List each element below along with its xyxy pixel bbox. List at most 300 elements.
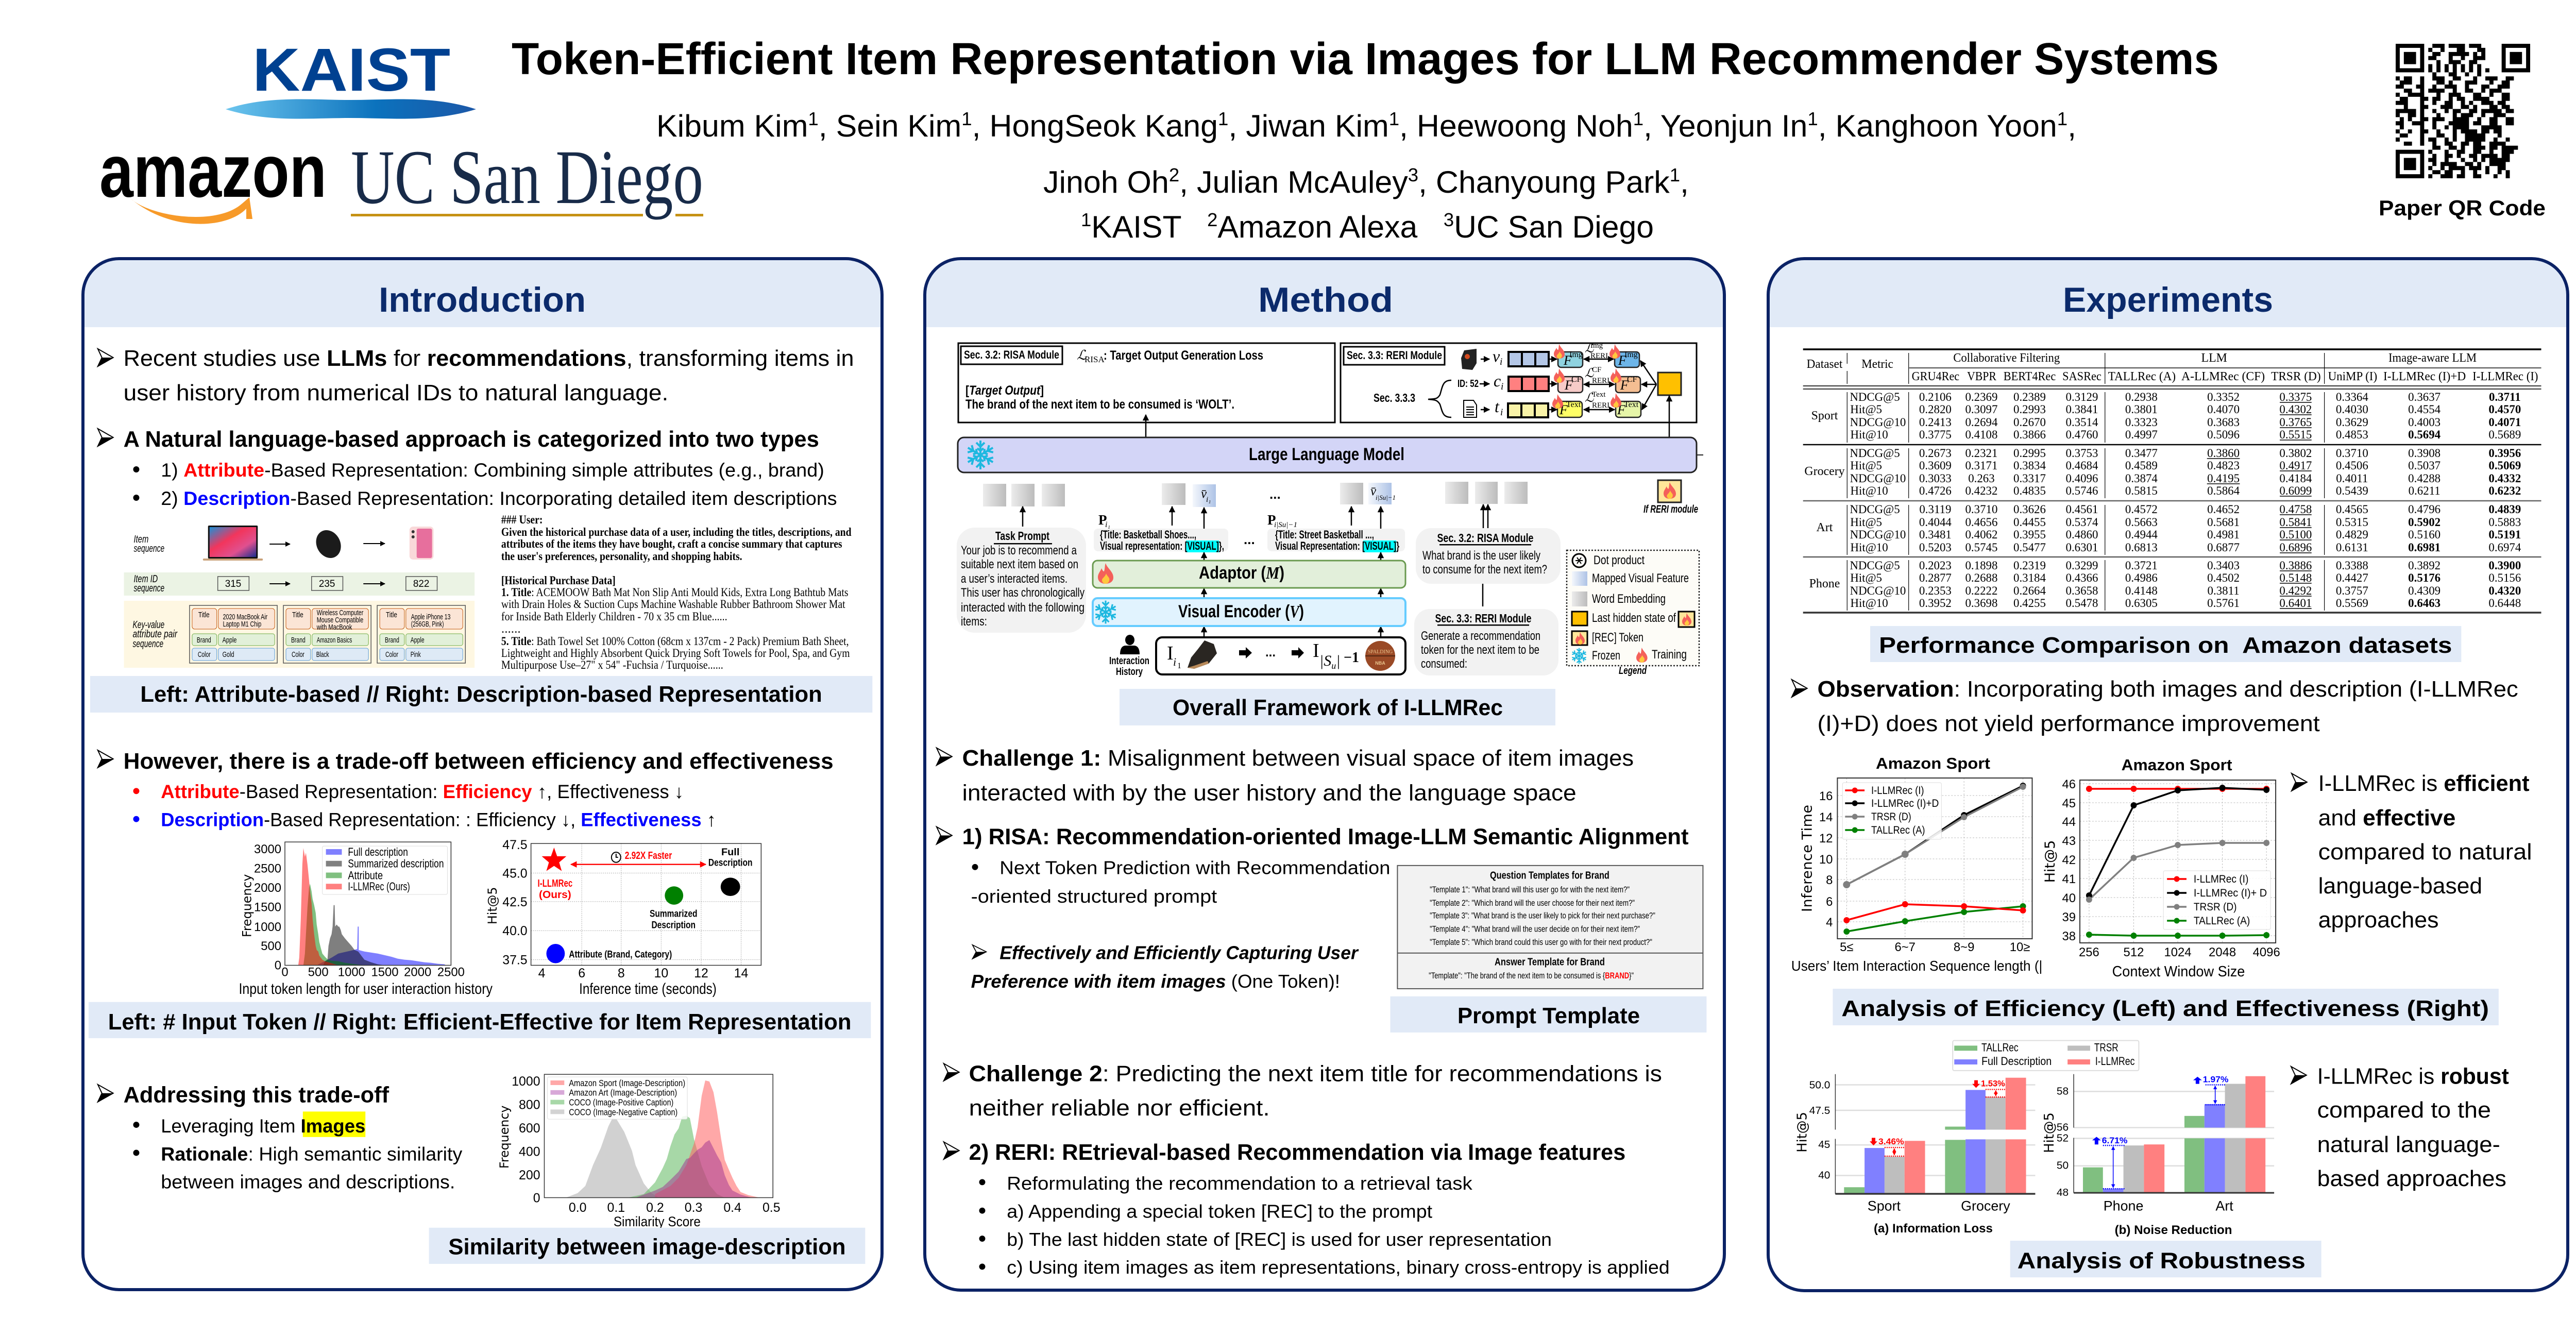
- box: interaction history: I: [1167, 642, 1174, 664]
- QR code: [2396, 46, 2528, 176]
- box: RISA module output: Sec. 3.2: RISA Module: [964, 348, 1059, 361]
- key-value group 3: (256GB, Pink): [411, 620, 444, 629]
- table rows: grocery: 0.4195: [2207, 472, 2240, 485]
- table rows: sport: 0.4302: [2279, 403, 2312, 416]
- legend: framework: Dot product: [1594, 553, 1645, 567]
- legend: histogram: [323, 845, 447, 894]
- icon: clock: [612, 852, 621, 863]
- key-value group 3: Apple iPhone 13: [411, 613, 450, 621]
- chart: similarity histogram: 200: [519, 1169, 540, 1182]
- chart: efficiency effectiveness scatter: Description: [651, 919, 696, 931]
- box: RERI module: RERI: [1590, 352, 1608, 360]
- legend: framework: [1567, 550, 1699, 677]
- table rows: phone: Hit@5: [1850, 571, 1882, 584]
- authors: , Yeonjun In: [1643, 109, 1807, 143]
- table rows: art: 0.3481: [1919, 528, 1952, 541]
- box: interaction history: |: [1336, 652, 1341, 669]
- box: prompt template: "Template 3": "What brand is the user likely to pick for their next purchase?": [1430, 911, 1655, 921]
- text: RISA: [937, 824, 1689, 992]
- text: efficient and effective: approaches: [2318, 907, 2438, 933]
- table rows: phone: 0.6448: [2488, 597, 2521, 610]
- table rows: grocery: 0.263: [1968, 472, 1995, 485]
- table rows: grocery: 0.5746: [2066, 484, 2098, 497]
- prompt item last: Visual Representation: [VISUAL]}: [1275, 539, 1399, 552]
- table rows: grocery: 0.5815: [2125, 484, 2158, 497]
- table rows: sport: 0.3097: [1965, 403, 1997, 416]
- legend: framework: [REC] Token: [1592, 631, 1643, 645]
- table rows: grocery: 0.6232: [2488, 484, 2521, 497]
- chart: inference time line: 6: [1826, 895, 1833, 909]
- chart: inference time line: 8: [1826, 873, 1833, 887]
- table rows: phone: [1850, 559, 2521, 610]
- chart: similarity histogram: 0.3: [685, 1201, 702, 1215]
- heading: Introduction: Introduction: [379, 281, 586, 319]
- table rows: grocery: 0.6211: [2409, 484, 2441, 497]
- table rows: sport: 0.2820: [1919, 403, 1952, 416]
- authors: 1: [961, 108, 972, 129]
- table rows: art: 0.5841: [2279, 516, 2312, 529]
- box: RISA module output: RISA: [1084, 354, 1105, 364]
- table rows: phone: 0.4366: [2066, 571, 2098, 584]
- chart: efficiency effectiveness scatter: Hit@5: [485, 887, 500, 924]
- chart: similarity histogram: [497, 1074, 781, 1229]
- table: performance comparison: BERT4Rec: [2004, 370, 2056, 383]
- table rows: phone: 0.2023: [1919, 559, 1952, 572]
- legend: context window: TRSR (D): [2194, 901, 2236, 913]
- table rows: art: 0.4829: [2336, 528, 2368, 541]
- table rows: art: 0.3955: [2013, 528, 2046, 541]
- text: description-based prompt sample: 1. Title: ACEMOOW Bath Mat Non Slip Anti Mould Kids, Extra Long Bathtub Mats: [501, 586, 849, 599]
- legend: framework: Mapped Visual Feature: [1592, 571, 1689, 585]
- diagram: attribute-based representation: sequence: [133, 638, 163, 650]
- chart: information loss bars: 47.5: [1809, 1105, 1830, 1117]
- prompt item last: P: [1267, 512, 1276, 528]
- authors: , Heewoong Noh: [1399, 109, 1633, 143]
- table rows: phone: 0.2319: [2013, 559, 2046, 572]
- text: observation: [1792, 677, 2518, 736]
- table rows: phone: 0.3698: [1965, 597, 1997, 610]
- table rows: phone: 0.3184: [2013, 571, 2046, 584]
- prompt item last: [1267, 512, 1405, 552]
- table: performance comparison: LLM: [2201, 351, 2227, 365]
- box: RISA module output: [Target Output]: [965, 383, 1044, 398]
- chart: context window line: Context Window Size: [2112, 963, 2245, 980]
- box: prompt template: Question Templates for Brand: [1490, 870, 1609, 882]
- chart: information loss bars: 40: [1818, 1169, 1830, 1181]
- table rows: art: 0.5160: [2408, 528, 2441, 541]
- table rows: sport: 0.4570: [2488, 403, 2521, 416]
- table rows: grocery: 0.3477: [2125, 447, 2158, 460]
- chart: information loss bars: Grocery: [1961, 1198, 2010, 1214]
- box: interaction history: −1: [1344, 650, 1359, 666]
- box: RERI module: ID: 52: [1458, 378, 1479, 390]
- table rows: sport: 0.3514: [2066, 416, 2098, 429]
- chart: similarity histogram: 0.1: [607, 1201, 625, 1215]
- icon: user: [1109, 635, 1149, 678]
- authors: , Julian McAuley: [1179, 165, 1408, 199]
- chart: efficiency effectiveness scatter: 6: [578, 967, 585, 980]
- table rows: sport: 0.5515: [2279, 428, 2312, 441]
- table rows: grocery: 0.3710: [2336, 447, 2368, 460]
- bubble: task prompt: Task Prompt: [995, 529, 1049, 543]
- chart: token length histogram: 1500: [371, 965, 399, 979]
- text: description-based prompt sample: the user's preferences, personality, and shopping habits.: [501, 550, 742, 563]
- box: RERI module: Img: [1590, 342, 1603, 350]
- caption: overall framework: [1120, 689, 1555, 725]
- box: RERI module: ℒ: [1585, 392, 1594, 405]
- chart: inference time line: 6~7: [1894, 940, 1916, 954]
- legend: robustness: Full Description: [1981, 1055, 2052, 1068]
- bubble: task prompt: [957, 528, 1086, 633]
- prompt item 1: P: [1098, 512, 1107, 528]
- box: RERI module: F: [1563, 353, 1572, 368]
- table rows: art: 0.5745: [1965, 541, 1997, 554]
- annotation: 6.71 percent: 6.71%: [2102, 1136, 2128, 1145]
- table rows: sport: Hit@5: [1850, 403, 1882, 416]
- text: RISA: -oriented structured prompt: [971, 886, 1217, 907]
- bubble: task prompt: This user has chronologically: [961, 586, 1084, 600]
- legend: context window: I-LLMRec (I): [2194, 873, 2248, 885]
- chart: noise reduction bars: (b) Noise Reduction: [2115, 1223, 2232, 1237]
- table rows: art: 0.5477: [2013, 541, 2046, 554]
- item id boxes: 822: [413, 579, 429, 589]
- box: RERI module: ℒ: [1585, 367, 1594, 380]
- table rows: sport: 0.3129: [2066, 391, 2098, 403]
- table rows: sport: Hit@10: [1850, 428, 1888, 441]
- table: performance comparison: I-LLMRec (I)+D: [2383, 370, 2466, 383]
- table rows: art: 0.4565: [2336, 503, 2368, 516]
- item id boxes: [218, 577, 437, 590]
- table rows: art: 0.5100: [2279, 528, 2312, 541]
- bubble: RERI module: consumed:: [1421, 657, 1467, 671]
- table rows: grocery: 0.4506: [2336, 459, 2368, 472]
- text: robust: based approaches: [2317, 1166, 2506, 1191]
- table: performance comparison: TRSR (D): [2271, 370, 2321, 383]
- table rows: phone: 0.2222: [1965, 584, 1997, 597]
- bubble: RERI module: Generate a recommendation: [1421, 629, 1540, 643]
- embeddings: i|Su|−1: [1376, 494, 1396, 501]
- chart: noise reduction bars: 48: [2057, 1187, 2069, 1198]
- table rows: grocery: 0.5037: [2408, 459, 2441, 472]
- table: performance comparison: SASRec: [2062, 370, 2102, 383]
- chart: token length histogram: Frequency: [240, 874, 254, 937]
- table rows: phone: 0.4309: [2408, 584, 2441, 597]
- authors: , Sein Kim: [819, 109, 961, 143]
- chart: context window line: 40: [2062, 891, 2076, 905]
- table rows: art: 0.4572: [2125, 503, 2158, 516]
- table rows: grocery: 0.3908: [2408, 447, 2441, 460]
- table rows: art: 0.6301: [2066, 541, 2098, 554]
- box: RERI module: F: [1617, 402, 1626, 417]
- chart: efficiency effectiveness scatter: 40.0: [502, 924, 528, 938]
- text: description-based prompt sample: Lightweight and Highly Absorbent Quick Drying Soft Towels for Pool, Spa, and Gym: [501, 647, 850, 660]
- table rows: phone: 0.4502: [2207, 571, 2240, 584]
- table rows: art: 0.5883: [2488, 516, 2521, 529]
- text: challenge 1: interacted with by the user history and the language space: [962, 781, 1577, 805]
- table rows: grocery: 0.3834: [2013, 459, 2046, 472]
- table rows: sport: 0.4853: [2336, 428, 2368, 441]
- block: large language model: Large Language Model: [1249, 445, 1404, 464]
- chart: context window line: 41: [2062, 872, 2076, 886]
- table rows: grocery: 0.4332: [2488, 472, 2521, 485]
- bubble: task prompt: a user’s interacted items.: [961, 572, 1067, 586]
- diagram: attribute-based representation: Key-value: [133, 619, 164, 631]
- table rows: phone: 0.2353: [1919, 584, 1952, 597]
- icon: shoe small: [1461, 349, 1477, 370]
- text: RISA: Preference with item images (One Token)!: [971, 971, 1340, 992]
- legend: robustness: TRSR: [2094, 1041, 2119, 1054]
- table rows: sport: 0.5096: [2207, 428, 2240, 441]
- table rows: sport: 0.4760: [2066, 428, 2098, 441]
- table rows: sport: 0.2369: [1965, 391, 1997, 403]
- annotation: 1.53 percent: 1.53%: [1981, 1079, 2005, 1088]
- box: prompt template: "Template 2": "Which brand will the user choose for their next item?": [1430, 898, 1635, 908]
- box: RERI module: F: [1564, 378, 1573, 393]
- table rows: grocery: 0.4232: [1965, 484, 1997, 497]
- chart: information loss bars: [1795, 1074, 2035, 1236]
- authors: 1: [2057, 108, 2067, 129]
- text: RISA: Effectively and Efficiently Capturing User: [999, 942, 1359, 963]
- table rows: grocery: 0.4096: [2066, 472, 2098, 485]
- table: performance comparison: A-LLMRec (CF): [2181, 370, 2265, 383]
- annotation: 3.46 percent: [1870, 1137, 1905, 1156]
- table rows: phone: 0.4986: [2125, 571, 2158, 584]
- table: performance comparison: TALLRec (A): [2108, 370, 2176, 383]
- table rows: grocery: 0.3874: [2125, 472, 2158, 485]
- prompt item 1: i₁: [1105, 520, 1110, 529]
- table rows: grocery: 0.2321: [1965, 447, 1997, 460]
- table rows: art: NDCG@5: [1850, 503, 1900, 516]
- table rows: sport: 0.3364: [2336, 391, 2368, 403]
- table rows: grocery: 0.2995: [2013, 447, 2046, 460]
- table rows: sport: 0.2106: [1919, 391, 1952, 403]
- chart: context window line: 45: [2062, 797, 2076, 810]
- legend: framework: Last hidden state of: [1592, 611, 1676, 625]
- chart: efficiency effectiveness scatter: 14: [734, 967, 749, 980]
- authors: 1: [1670, 164, 1680, 185]
- box: prompt template: [1397, 866, 1703, 989]
- item id boxes: 235: [319, 579, 335, 589]
- panel content: lower experiments: [1795, 1041, 2509, 1277]
- chart: inference time line: 10≥: [2010, 940, 2030, 954]
- table: performance comparison: Art: [1817, 521, 1833, 534]
- authors: ,: [2067, 109, 2076, 143]
- title: Token-Efficient Item Representation via Images for LLM Recommender Systems: [512, 34, 2219, 84]
- legend: inference time: [1842, 783, 1941, 839]
- text: description-based prompt sample: attributes of the items they have bought, craft a concise summary that captures: [501, 537, 842, 550]
- text: description-based prompt sample: 5. Title: Bath Towel Set 100% Cotton (68cm x 137cm - 2 Pack) Premium Bath Sheet,: [501, 635, 849, 648]
- table rows: sport: 0.3629: [2336, 416, 2368, 429]
- table rows: art: 0.4062: [1965, 528, 1997, 541]
- block: visual encoder: [1093, 598, 1405, 626]
- icon: basketball: NBA: [1375, 661, 1385, 666]
- box: RERI module: Sec. 3.3: RERI Module: [1347, 349, 1442, 362]
- table rows: grocery: 0.4917: [2279, 459, 2312, 472]
- table rows: art: 0.5681: [2207, 516, 2240, 529]
- arrows: to embeddings: [1023, 504, 1488, 641]
- box: RERI module: Img: [1624, 350, 1638, 359]
- chart: token length histogram: 2500: [437, 965, 465, 979]
- table rows: phone: 0.4292: [2279, 584, 2312, 597]
- text: recent studies: Recent studies use LLMs for recommendations, transforming items in: [124, 346, 854, 371]
- legend: inference time: I-LLMRec (I)+D: [1871, 798, 1939, 809]
- text: description-based prompt sample: with Drain Holes & Suction Cups Machine Washable Rubber Bathroom Shower Mat: [501, 598, 845, 611]
- prompt item 1: [1094, 512, 1228, 552]
- key-value group 3: Apple: [411, 636, 425, 645]
- chart: token length histogram: 2500: [254, 862, 281, 875]
- table rows: art: 0.4796: [2408, 503, 2441, 516]
- table rows: grocery: 0.4726: [1919, 484, 1952, 497]
- diagram: attribute-based representation: sequence: [134, 583, 164, 594]
- text: observation: (I)+D) does not yield performance improvement: [1818, 711, 2320, 736]
- table rows: sport: 0.4071: [2488, 416, 2521, 429]
- table rows: sport: 0.2938: [2125, 391, 2158, 403]
- caption: left attribute right description: Left: Attribute-based // Right: Description-based Representation: [140, 682, 822, 707]
- chart: efficiency effectiveness scatter: 2.92X Faster: [625, 850, 672, 861]
- flames: [1554, 344, 1565, 359]
- box: RERI module: Sec. 3.3.3: [1374, 391, 1415, 404]
- table rows: art: 0.4944: [2125, 528, 2158, 541]
- icon: basketball: SPALDING: [1368, 649, 1393, 655]
- table rows: art: 0.3119: [1919, 503, 1951, 516]
- panel: introduction: [83, 259, 882, 1290]
- chart: context window line: [2042, 756, 2280, 980]
- text: trade-off: [98, 749, 834, 830]
- table rows: grocery: 0.3033: [1919, 472, 1952, 485]
- box: RERI module: F: [1559, 402, 1568, 417]
- box: interaction history: u: [1331, 661, 1336, 671]
- table rows: grocery: 0.4184: [2279, 472, 2312, 485]
- diagram: attribute-based representation: sequence: [134, 543, 164, 554]
- table rows: grocery: 0.5439: [2336, 484, 2368, 497]
- legend: similarity: COCO (Image-Negative Caption): [569, 1107, 677, 1117]
- authors: 2: [1207, 209, 1217, 230]
- annotation: 1.97 percent: 1.97%: [2203, 1075, 2229, 1085]
- table rows: phone: 0.4255: [2013, 597, 2046, 610]
- table rows: grocery: 0.3171: [1965, 459, 1997, 472]
- table rows: grocery: 0.3860: [2207, 447, 2240, 460]
- text: RERI: a) Appending a special token [REC] to the prompt: [1007, 1201, 1432, 1222]
- caption: left attribute right description: [90, 676, 872, 713]
- text: RISA: 1) RISA: Recommendation-oriented Image-LLM Semantic Alignment: [962, 824, 1689, 849]
- table rows: phone: 0.3299: [2066, 559, 2098, 572]
- key-value group 2: Mouse Compatible: [317, 616, 363, 624]
- text: addressing trade-off: Rationale: High semantic similarity: [161, 1143, 463, 1164]
- table rows: sport: 0.2413: [1919, 416, 1952, 429]
- bubble: task prompt: interacted with the following: [961, 601, 1084, 615]
- box: prompt template: "Template 4": "What brand will the user decide on for their next item?": [1430, 924, 1640, 934]
- box: RERI module: ℒ: [1585, 342, 1594, 356]
- table rows: sport: 0.2993: [2013, 403, 2046, 416]
- key-value group 3: Color: [385, 650, 398, 659]
- prompt item last: {Title: Street Basketball ...,: [1275, 528, 1374, 541]
- text: RERI: 2) RERI: REtrieval-based Recommendation via Image features: [969, 1140, 1625, 1165]
- logo: KAIST: KAIST: [252, 36, 450, 104]
- table rows: art: 0.6131: [2336, 541, 2368, 554]
- block: adaptor: Adaptor (M): [1199, 563, 1284, 583]
- chart: inference time line: Amazon Sport: [1876, 754, 1990, 772]
- bubble: RERI module: token for the next item to be: [1421, 643, 1539, 657]
- key-value group 2: Color: [292, 650, 304, 659]
- box: interaction history: |S: [1319, 652, 1331, 669]
- table rows: grocery: 0.4288: [2408, 472, 2441, 485]
- chart: efficiency effectiveness scatter: 10: [654, 967, 668, 980]
- authors: 1: [1081, 209, 1091, 230]
- table rows: grocery: 0.2673: [1919, 447, 1952, 460]
- table rows: phone: 0.6401: [2279, 597, 2312, 610]
- box: RERI module: i: [1501, 381, 1503, 392]
- table: performance comparison: UniMP (I): [2328, 370, 2377, 383]
- text: description-based prompt sample: for Inside Bath Elderly Children - 70 x 35 cm Blue......: [501, 610, 727, 623]
- legend: framework: Frozen: [1592, 649, 1620, 663]
- chart: context window line: 46: [2062, 777, 2076, 791]
- table rows: sport: 0.2694: [1965, 416, 1998, 429]
- box: RERI module: Text: [1624, 400, 1639, 409]
- authors: [656, 108, 2076, 244]
- table rows: grocery: 0.6099: [2279, 484, 2312, 497]
- arrows: to modules: [1146, 396, 1669, 437]
- chart: context window line: 1024: [2164, 945, 2192, 959]
- table rows: art: 0.3710: [1965, 503, 1997, 516]
- chart: similarity histogram: 600: [519, 1122, 540, 1136]
- key-value group 2: Wireless Computer: [317, 608, 363, 617]
- text: description-based prompt sample: Multipurpose Use–27" x 54" -Fuchsia / Turquoise......: [501, 658, 723, 671]
- bubble: RISA module: [1416, 528, 1561, 584]
- table rows: grocery: Hit@5: [1850, 459, 1882, 472]
- panel content: upper introduction: [90, 281, 872, 713]
- table rows: art: NDCG@10: [1850, 528, 1906, 541]
- text: efficient and effective: I-LLMRec is efficient: [2318, 771, 2530, 796]
- prompt item last: i|Su|−1: [1274, 521, 1297, 529]
- chart: token length histogram: 1000: [338, 965, 365, 979]
- table rows: grocery: NDCG@10: [1850, 472, 1906, 485]
- box: RERI module: c: [1494, 371, 1501, 390]
- box: RISA module output: [958, 343, 1335, 422]
- chart: context window line: Amazon Sport: [2122, 756, 2232, 774]
- text: efficient and effective: language-based: [2318, 873, 2482, 899]
- table rows: art: [1850, 503, 2521, 554]
- table rows: phone: 0.6305: [2125, 597, 2158, 610]
- bubble: RERI module: [1414, 609, 1558, 675]
- table rows: sport: 0.3323: [2125, 416, 2158, 429]
- caption: input token: Left: # Input Token // Right: Efficient-Effective for Item Representation: [108, 1009, 851, 1035]
- panel content: lower introduction: [89, 749, 871, 1264]
- box: RERI module: RERI: [1592, 401, 1609, 410]
- table rows: sport: 0.4070: [2207, 403, 2240, 416]
- chart: efficiency effectiveness scatter: 4: [538, 967, 546, 980]
- logo: UC San Diego: UC San Diego: [351, 134, 703, 220]
- chart: information loss bars: Hit@5: [1795, 1112, 1810, 1153]
- key-value group 3: Pink: [411, 650, 421, 659]
- table rows: phone: 0.2877: [1919, 571, 1952, 584]
- text: trade-off: Attribute-Based Representation: Efficiency ↑, Effectiveness ↓: [161, 781, 684, 802]
- text: description-based prompt sample: ### User:: [501, 513, 543, 526]
- block: adaptor: [1093, 561, 1405, 588]
- chart: noise reduction bars: Phone: [2104, 1198, 2143, 1214]
- embeddings: v̄: [1201, 487, 1207, 501]
- bubble: RERI module: Sec. 3.3: RERI Module: [1435, 612, 1531, 625]
- bubble: task prompt: items:: [961, 615, 987, 629]
- bubble: task prompt: Your job is to recommend a: [961, 544, 1077, 557]
- text: robust: I-LLMRec is robust: [2317, 1064, 2509, 1089]
- table rows: art: Hit@5: [1850, 516, 1882, 529]
- chart: similarity histogram: 0: [533, 1191, 540, 1205]
- box: RISA module output: The brand of the next item to be consumed is ‘WOLT’.: [965, 397, 1234, 412]
- table rows: art: 0.5902: [2408, 516, 2441, 529]
- chart: noise reduction bars: 52: [2057, 1132, 2069, 1144]
- table rows: sport: NDCG@10: [1850, 416, 1906, 429]
- text: description-based prompt sample: Given the historical purchase data of a user, including the titles, descriptions, and: [501, 526, 852, 538]
